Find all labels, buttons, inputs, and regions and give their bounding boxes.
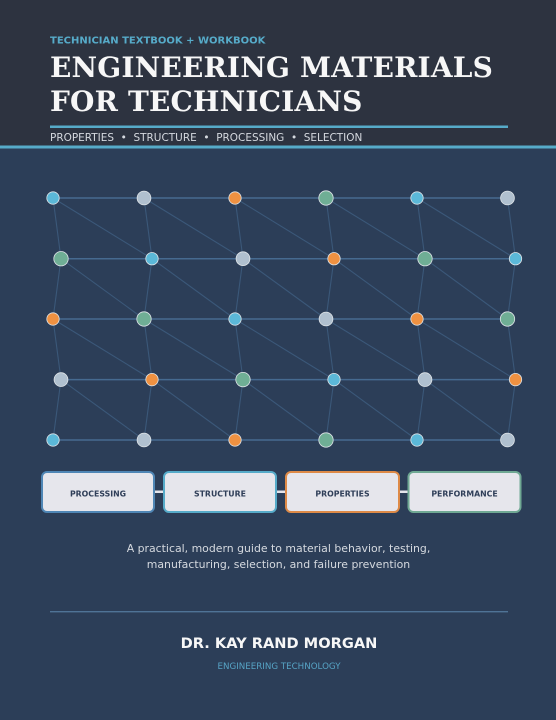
department: ENGINEERING TECHNOLOGY [217,662,341,672]
eyebrow label: TECHNICIAN TEXTBOOK + WORKBOOK [50,36,267,47]
process box: processing [42,472,154,512]
lattice links [53,198,516,440]
header rule [50,126,508,128]
process connectors [153,490,409,493]
title [50,51,493,118]
process box: performance: PERFORMANCE [431,490,498,498]
title: ENGINEERING MATERIALS [50,51,493,84]
description: A practical, modern guide to material behavior, testing, [127,542,430,555]
process box: structure [164,472,276,512]
title: FOR TECHNICIANS [50,85,363,118]
process box: properties: PROPERTIES [315,490,370,498]
header band [0,0,556,148]
process box: performance [408,472,520,512]
subtitle: PROPERTIES • STRUCTURE • PROCESSING • SELECTION [50,132,362,144]
description: manufacturing, selection, and failure prevention [147,558,410,571]
footer divider [50,611,508,612]
description [127,542,430,571]
lattice network diagram [47,191,522,447]
process box: properties [286,472,399,512]
process box: structure: STRUCTURE [194,490,246,498]
lattice nodes [47,191,522,447]
author: DR. KAY RAND MORGAN [181,635,377,652]
process box: processing: PROCESSING [70,490,126,498]
